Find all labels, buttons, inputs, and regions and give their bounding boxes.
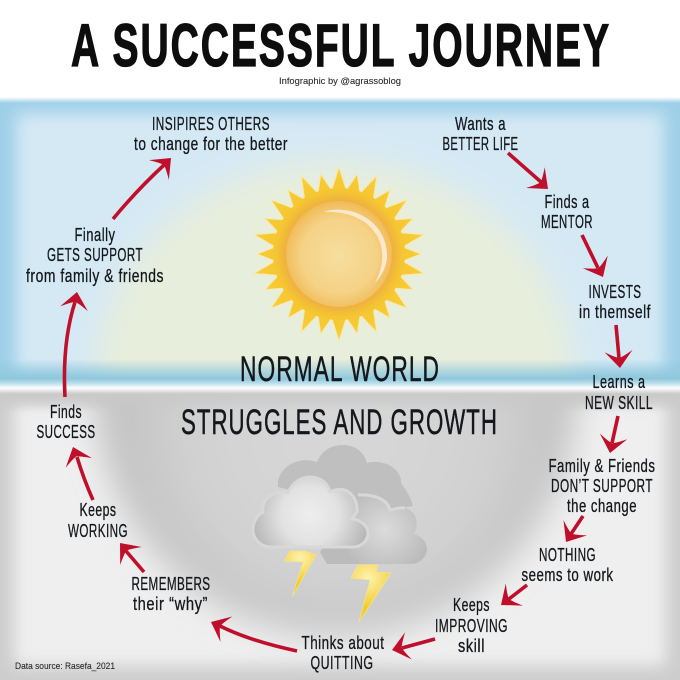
step: wants a better life: Wants a [455, 114, 506, 134]
step: finds success [36, 402, 96, 442]
step: finally gets support [26, 225, 164, 286]
step: finds a mentor [541, 192, 593, 232]
step: finds success: Finds [50, 402, 82, 422]
step: nothing seems to work [522, 545, 614, 585]
step: remembers their why: REMEMBERS [132, 574, 210, 594]
arrow 9 [109, 534, 144, 572]
step: keeps improving skill: IMPROVING [435, 616, 508, 636]
arrow 10 [60, 442, 93, 500]
step: wants a better life [442, 114, 518, 154]
arrow 12 [113, 148, 181, 219]
step: invests in themself: in themself [579, 302, 651, 322]
icon: storm clouds [253, 445, 427, 622]
step: inspires others: to change for the better [134, 134, 288, 154]
arrow 6 [492, 584, 527, 616]
step: wants a better life: BETTER LIFE [442, 134, 518, 154]
step: invests in themself: INVESTS [588, 282, 642, 302]
step: keeps improving skill: skill [458, 636, 485, 656]
step: finally gets support: from family & friends [26, 266, 164, 286]
icon: sun [252, 167, 426, 341]
step: inspires others [134, 114, 288, 154]
arrow 2 [582, 235, 615, 283]
data source note: Data source: Rasefa_2021 [15, 661, 115, 672]
step: keeps improving skill [435, 595, 508, 656]
panel: struggles and growth ground [0, 389, 680, 680]
arrow 3 [605, 325, 634, 369]
step: keeps working: WORKING [68, 521, 128, 541]
step: learns a new skill: Learns a [592, 372, 646, 392]
step: remembers their why [132, 574, 210, 614]
step: learns a new skill [585, 372, 653, 413]
panel: normal world sky [0, 98, 680, 388]
step: nothing seems to work: seems to work [522, 565, 614, 585]
step: keeps working [68, 500, 128, 541]
step: finally gets support: GETS SUPPORT [47, 245, 143, 265]
step: finds a mentor: MENTOR [541, 212, 593, 232]
arrow 5 [554, 516, 587, 550]
arrow 7 [389, 632, 435, 664]
step: family and friends don't support: the change [567, 496, 637, 516]
step: remembers their why: their “why” [133, 594, 208, 614]
step: nothing seems to work: NOTHING [539, 545, 596, 565]
step: family and friends don't support [548, 456, 656, 516]
step: finds a mentor: Finds a [544, 192, 590, 212]
arrow 1 [508, 153, 557, 199]
step: thinks about quitting [302, 633, 384, 673]
byline: Infographic by @agrassoblog [279, 76, 401, 87]
heading: struggles and growth: STRUGGLES AND GROWTH [181, 403, 498, 442]
step: thinks about quitting: Thinks about [302, 633, 384, 653]
arrow 8 [205, 609, 297, 651]
arrow 4 [596, 416, 627, 456]
step: keeps working: Keeps [80, 500, 116, 520]
step: invests in themself [579, 282, 651, 322]
step: keeps improving skill: Keeps [453, 595, 490, 615]
step: thinks about quitting: QUITTING [310, 653, 374, 673]
arrow 11 [60, 290, 91, 397]
heading: normal world: NORMAL WORLD [240, 350, 440, 389]
step: inspires others: INSIPIRES OTHERS [152, 114, 270, 134]
step: finds success: SUCCESS [36, 422, 96, 442]
step: finally gets support: Finally [74, 225, 116, 245]
